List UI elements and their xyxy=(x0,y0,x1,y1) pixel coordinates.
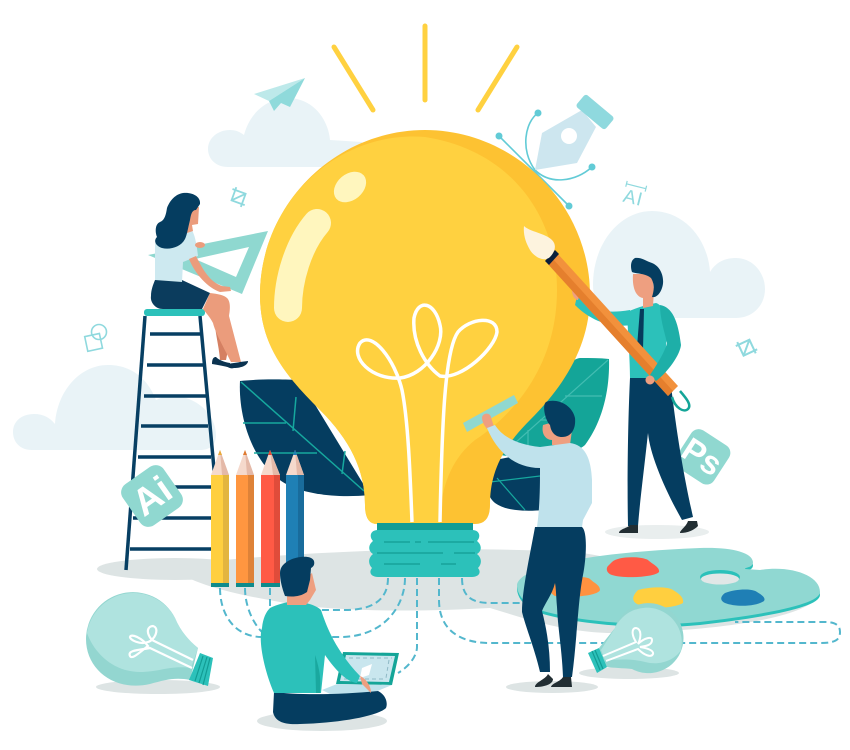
hand on brush xyxy=(646,376,654,384)
highlight streak xyxy=(288,223,317,308)
trousers xyxy=(522,527,586,677)
dashed connectors xyxy=(220,578,840,673)
badge: Ai xyxy=(117,461,187,531)
ladder xyxy=(126,309,215,570)
cloud: left xyxy=(13,365,216,450)
badge: Ps: Ps xyxy=(675,430,729,483)
badge: Ai: Ai xyxy=(125,469,180,525)
icon: crop top left xyxy=(228,186,249,208)
palette xyxy=(517,548,820,627)
small bulb: right xyxy=(579,603,684,679)
shirt xyxy=(627,303,668,378)
icon: text tool AI: AI xyxy=(621,186,645,211)
skirt xyxy=(151,280,210,309)
shadow xyxy=(605,525,709,539)
pencil red xyxy=(261,450,280,587)
filament xyxy=(130,626,193,668)
bulb base xyxy=(377,523,473,531)
bulb glass xyxy=(260,130,590,524)
woman on ladder xyxy=(148,193,268,368)
ruler xyxy=(463,395,518,432)
paint yellow xyxy=(633,587,683,608)
paint blue xyxy=(721,589,765,606)
hand xyxy=(482,414,494,429)
shirt xyxy=(155,230,198,282)
ground shadow xyxy=(97,549,815,633)
hand xyxy=(572,287,581,300)
icon: crop right xyxy=(735,336,758,360)
arm xyxy=(189,256,231,292)
leaf: left dark xyxy=(240,379,370,496)
shadow xyxy=(506,681,598,693)
shoes xyxy=(535,674,553,687)
laptop screen xyxy=(336,652,399,685)
filament xyxy=(603,628,653,661)
bulb base xyxy=(588,648,607,673)
front leg xyxy=(203,293,241,362)
neck and face xyxy=(287,573,316,605)
highlight spot xyxy=(328,165,372,209)
shirt xyxy=(487,425,592,527)
sitting man with laptop xyxy=(257,557,399,731)
icon: pen nib with anchor handles xyxy=(496,94,615,210)
neck and face xyxy=(633,274,654,308)
light bulb xyxy=(260,130,590,577)
neck and face xyxy=(184,207,199,234)
pencil orange xyxy=(236,450,254,587)
palette rim xyxy=(517,551,820,627)
filament xyxy=(358,305,497,522)
ladder seat xyxy=(144,309,205,316)
cloud: top xyxy=(208,98,362,167)
legs xyxy=(273,691,387,724)
palette hole xyxy=(700,570,740,584)
paintbrush xyxy=(524,226,689,410)
bulb base xyxy=(189,653,213,686)
back leg xyxy=(215,317,230,360)
paint orange xyxy=(549,577,600,597)
small bulb shadow xyxy=(96,680,220,694)
hair xyxy=(631,258,663,297)
palette top xyxy=(517,548,820,624)
trousers xyxy=(628,378,693,526)
icon: shapes xyxy=(85,324,106,351)
hair xyxy=(280,557,314,597)
bulb light area xyxy=(87,593,198,672)
paint red xyxy=(607,557,659,577)
hair xyxy=(155,193,200,249)
right arm xyxy=(650,305,681,381)
bulb inner light xyxy=(260,137,557,524)
cloud: right xyxy=(593,211,765,318)
leaf: right green xyxy=(500,358,609,458)
small bulb shadow xyxy=(579,667,679,679)
icon: paper plane xyxy=(254,78,305,111)
leaf: right dark xyxy=(488,450,545,511)
pencils xyxy=(211,450,304,587)
pencil yellow xyxy=(211,450,229,587)
bulb body xyxy=(599,603,684,673)
shirt xyxy=(261,602,360,693)
sun rays xyxy=(334,26,517,110)
triangle ruler xyxy=(148,231,268,294)
left arm xyxy=(575,296,632,326)
bulb body xyxy=(86,592,198,686)
shirt fold xyxy=(315,655,320,693)
man at front with ruler xyxy=(463,395,598,693)
man with paintbrush xyxy=(524,226,709,539)
bulb light area xyxy=(601,608,682,663)
hair xyxy=(544,401,575,437)
hand xyxy=(360,676,371,693)
hand on ruler xyxy=(195,242,205,248)
laptop base xyxy=(322,684,392,694)
neck and ear xyxy=(543,423,572,445)
shadow xyxy=(257,711,387,731)
tie xyxy=(637,309,644,350)
small bulb: left xyxy=(86,592,220,694)
shoes xyxy=(619,525,638,533)
pencil blue xyxy=(286,450,304,575)
shoes xyxy=(212,357,231,368)
